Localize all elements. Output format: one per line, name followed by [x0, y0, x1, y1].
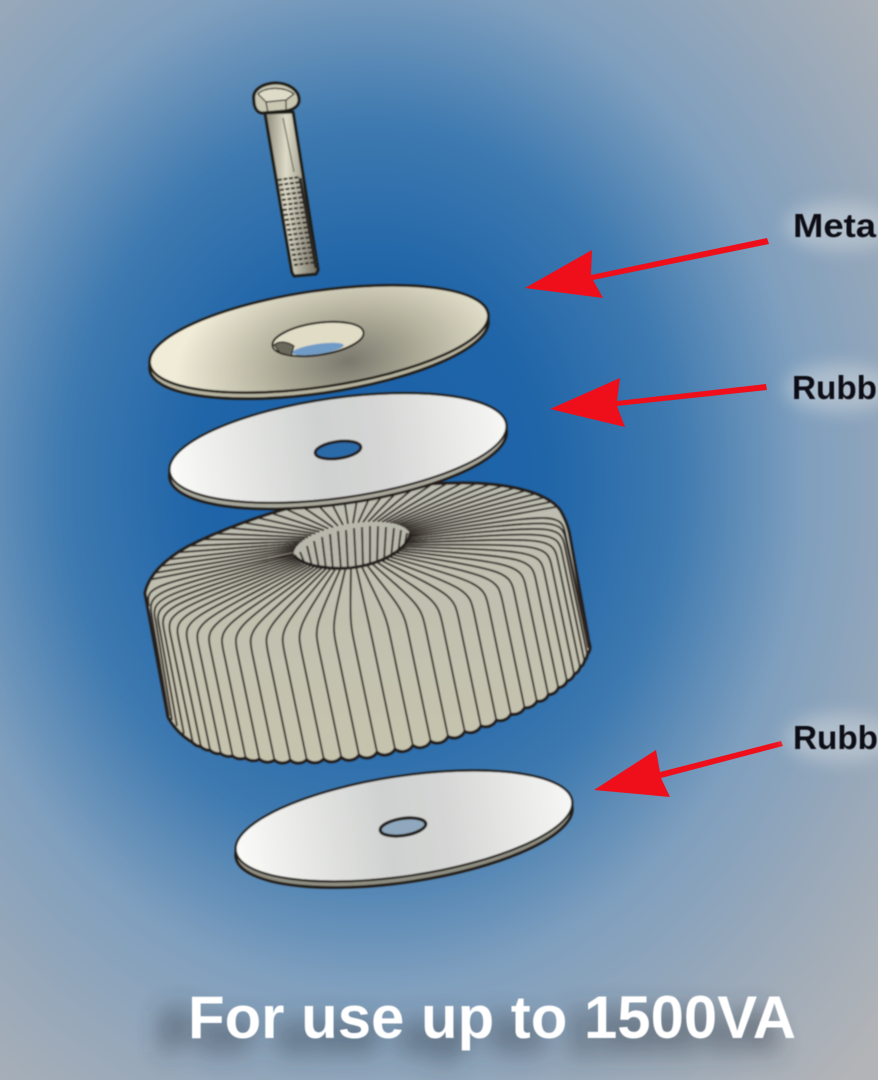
toroid body outline	[145, 483, 590, 763]
label: metal washer	[785, 202, 878, 250]
rubber washer lower	[228, 751, 580, 907]
arrow: lower rubber washer	[594, 741, 783, 797]
rubber washer upper	[163, 375, 513, 527]
caption: For use up to 1500VA	[188, 984, 796, 1051]
label: metal washer: Meta	[793, 207, 877, 244]
upper washer hole	[314, 438, 362, 462]
label: lower rubber washer: Rubb	[793, 719, 878, 756]
arrow: upper rubber washer	[550, 378, 767, 427]
label: upper rubber washer	[785, 364, 878, 412]
lower washer hole	[379, 815, 427, 839]
side windings	[148, 518, 588, 760]
centre hole	[290, 514, 414, 576]
washer hole	[270, 316, 366, 362]
radial windings on top	[150, 474, 558, 580]
caption: For use up to 1500VA	[160, 998, 780, 1065]
metal washer	[143, 267, 495, 417]
icon: bolt	[254, 83, 318, 276]
toroidal transformer	[145, 474, 590, 763]
label: upper rubber washer: Rubb	[792, 369, 877, 406]
arrow: metal washer	[525, 238, 769, 298]
exploded assembly illustration	[143, 83, 590, 907]
label: lower rubber washer	[785, 714, 878, 762]
